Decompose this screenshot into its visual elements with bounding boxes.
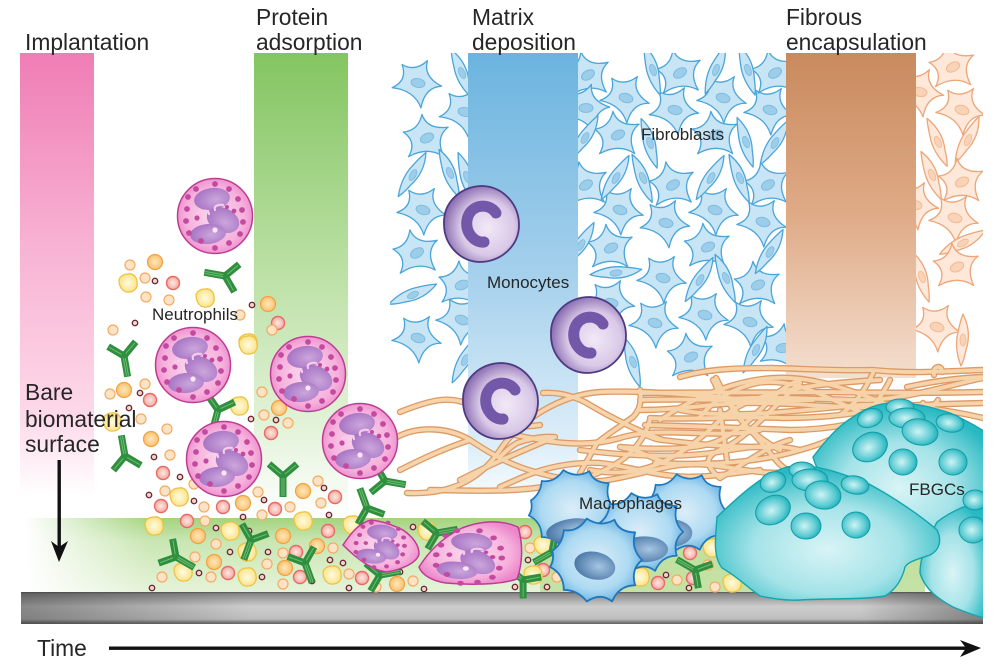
heading: protein adsorption: adsorption — [256, 29, 362, 55]
label: bare biomaterial surface: surface — [25, 431, 100, 457]
giant cell: right — [920, 490, 987, 618]
arrow: time axis — [109, 640, 981, 657]
label: monocytes: Monocytes — [487, 273, 569, 292]
protein and cytokine particles — [103, 254, 741, 592]
label: bare biomaterial surface: Bare — [25, 379, 73, 405]
flattened neutrophil, small — [343, 515, 419, 575]
stage bar: protein adsorption — [254, 53, 348, 520]
antibodies — [108, 259, 712, 598]
heading: matrix deposition: deposition — [472, 29, 576, 55]
macrophage cells — [529, 470, 727, 601]
monocyte cells — [444, 186, 626, 439]
heading: fibrous encapsulation: Fibrous — [786, 4, 862, 30]
foreign body giant cells — [715, 399, 987, 618]
arrow: down to surface — [51, 460, 68, 562]
green protein layer on surface — [25, 518, 925, 593]
label: fibroblasts: Fibroblasts — [641, 125, 724, 144]
giant cell: front — [715, 462, 940, 600]
label: FBGCs: FBGCs — [909, 480, 965, 499]
heading: fibrous encapsulation: encapsulation — [786, 29, 927, 55]
fibroblast field: blue cells — [387, 43, 809, 389]
giant cell: back — [813, 399, 985, 540]
heading: implantation: Implantation — [25, 29, 149, 55]
label: time: Time — [37, 635, 87, 661]
biomaterial surface — [21, 592, 983, 624]
neutrophil cells — [156, 178, 522, 592]
stage bar: matrix deposition — [468, 53, 578, 493]
label: bare biomaterial surface: biomaterial — [25, 406, 137, 432]
heading: protein adsorption: Protein — [256, 4, 328, 30]
stage bar: fibrous encapsulation — [786, 53, 916, 378]
fibroblast field: orange cells — [916, 53, 983, 367]
label: macrophages: Macrophages — [579, 494, 682, 513]
collagen fibers — [397, 367, 983, 493]
label: neutrophils: Neutrophils — [152, 305, 238, 324]
stage bar: implantation — [20, 53, 94, 495]
heading: matrix deposition: Matrix — [472, 4, 535, 30]
flattened neutrophil, large — [419, 521, 522, 592]
